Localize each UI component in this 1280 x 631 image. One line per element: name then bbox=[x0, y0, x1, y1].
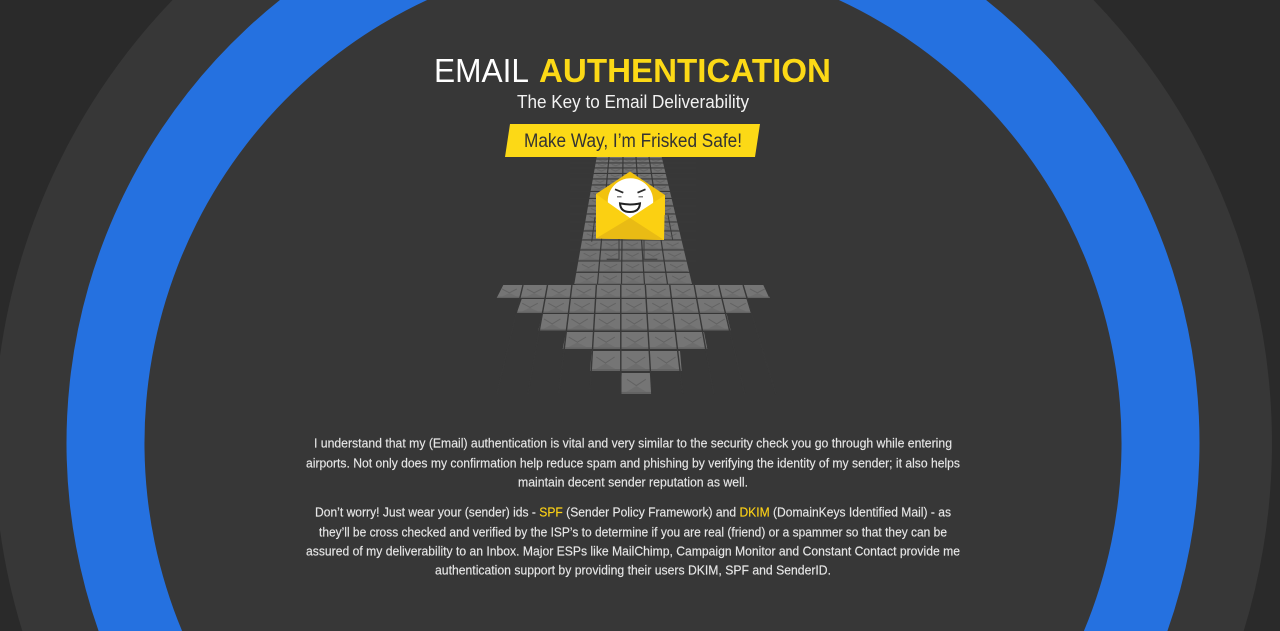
arrow head bbox=[497, 285, 776, 394]
envelope lower flap bbox=[596, 218, 664, 240]
banner bbox=[505, 124, 760, 157]
mouth bbox=[620, 203, 640, 212]
paragraph 2: authentication support by providing their users DKIM, SPF and SenderID. bbox=[435, 562, 831, 578]
paragraph 2: assured of my deliverability to an Inbox. Major ESPs like MailChimp, Campaign Monitor and Constant Contact provide me bbox=[306, 544, 960, 558]
paragraph 2: they’ll be cross checked and verified by the ISP’s to determine if you are real (friend) or a spammer so that they can be bbox=[319, 524, 947, 540]
envelope front bbox=[596, 194, 665, 240]
paragraph 2 bbox=[306, 504, 960, 578]
arrow of envelope tiles bbox=[497, 157, 776, 394]
paragraph 1: airports. Not only does my confirmation help reduce spam and phishing by verifying the identity of my sender; it also helps bbox=[306, 456, 960, 470]
paragraph 2: Don’t worry! Just wear your (sender) ids - SPF (Sender Policy Framework) and DKIM (DomainKeys Identified Mail) - as bbox=[315, 504, 951, 520]
arrow stem bbox=[570, 157, 696, 284]
paragraph 1: maintain decent sender reputation as well. bbox=[518, 474, 748, 490]
paragraph 1: I understand that my (Email) authentication is vital and very similar to the security check you go through while entering bbox=[314, 436, 952, 450]
subtitle: The Key to Email Deliverability bbox=[517, 92, 749, 112]
banner: Make Way, I’m Frisked Safe! bbox=[524, 131, 742, 152]
character limbs bbox=[592, 215, 673, 259]
title: AUTHENTICATION bbox=[539, 52, 831, 89]
envelope character bbox=[592, 172, 673, 259]
paragraph 1 bbox=[306, 436, 960, 490]
envelope back flap bbox=[596, 172, 665, 215]
face bbox=[608, 178, 653, 224]
title: EMAIL bbox=[434, 52, 529, 89]
